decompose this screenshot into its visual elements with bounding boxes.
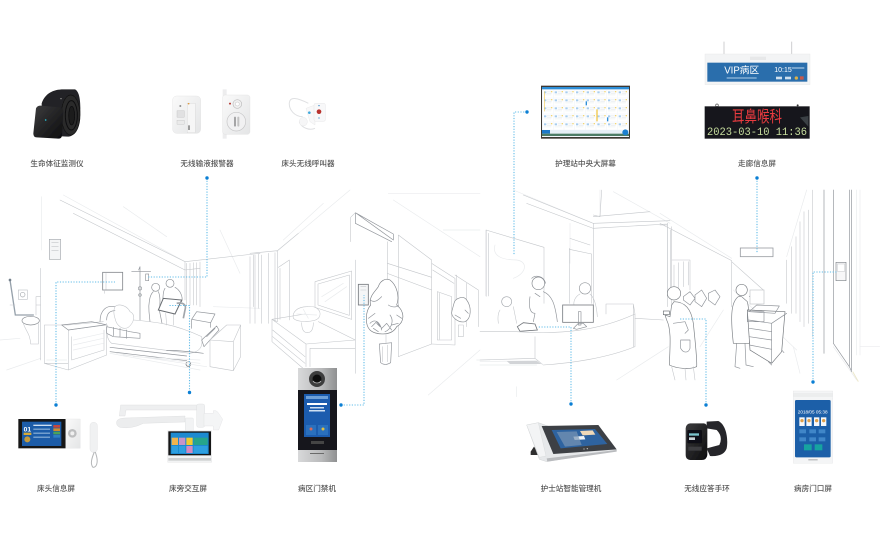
label: central nursing station screen: 护理站中央大屏幕 [555,158,616,168]
device: VIP ward hanging sign [705,42,810,85]
sketch: corridor and staff [660,190,880,398]
label: bedside interactive screen: 床旁交互屏 [169,483,207,493]
dotted connector lines [54,110,838,407]
device: wireless infusion alarms [173,89,250,139]
icon: grab bar and toilet [9,279,41,344]
label: wireless response wristband: 无线应答手环 [684,483,730,493]
icon: wall display in nurse station [486,230,544,303]
icon: small potted plant [452,298,470,337]
device: bedside wireless call button [289,98,325,129]
label: bedside info screen: 床头信息屏 [37,483,75,493]
icon: IV stand [132,267,151,320]
label: vital signs monitor: 生命体征监测仪 [30,158,84,168]
sketch: patient room [0,195,260,371]
device: bedside info screen and handset [18,419,97,467]
icon: hospital bed and patient [100,305,219,370]
icon: wall screen in room [103,272,123,293]
icon: reception desk [480,304,635,365]
icon: bedside cabinet [44,322,107,370]
device: central nursing station screen [541,86,630,139]
device: bedside info screen and handset: 01 [24,426,31,433]
device: bedside interactive screen on arm [117,404,223,462]
icon: nurses [498,276,597,323]
label: corridor info screen: 走廊信息屏 [738,158,776,168]
icon: wall mirror [315,271,352,319]
icon: desk monitor and phone [517,305,593,331]
label: bedside wireless call button: 床头无线呼叫器 [281,158,335,168]
device: corridor LED display: 耳鼻喉科 [732,108,782,126]
device: corridor LED display [705,104,810,139]
device: wireless response wristband [686,421,727,460]
icon: reception counter and flowers [272,306,355,370]
icon: door panel on corridor wall [836,262,846,281]
device: ward door screen [793,391,833,463]
device: VIP ward hanging sign: 10:15 [774,67,792,74]
icon: side table and bench [192,312,241,371]
icon: medical staff with tablet [149,279,185,325]
icon: nurse with cart [732,284,787,368]
label: ward door access unit: 病区门禁机 [298,483,336,493]
icon: door phone on wall [358,284,368,305]
label: ward door screen: 病房门口屏 [794,483,832,493]
device: ward door access unit [298,368,337,462]
icon: ceiling sign in corridor [740,248,773,257]
icon: distant waiting chairs [683,290,720,307]
sketch: nurse station [480,190,672,397]
device: ward door screen: 2018/05 05:38 [798,409,828,414]
icon: large potted plant [366,279,403,364]
device: corridor LED display: 2023-03-10 11:36 [707,127,807,139]
icon: corner wall and column [351,213,478,373]
device: vital signs monitor [33,89,80,139]
sketch: ward corridor entrance [250,190,490,395]
icon: doctor with phone [663,287,697,380]
label: wireless infusion alarm: 无线输液报警器 [180,158,234,168]
label: nurse station management terminal: 护士站智能管理机 [541,483,602,493]
icon: wall notice [49,239,61,259]
icon: corridor right wall [787,190,860,382]
device: VIP ward hanging sign: VIP病区 [724,65,759,77]
device: nurse station management terminal [527,423,617,462]
